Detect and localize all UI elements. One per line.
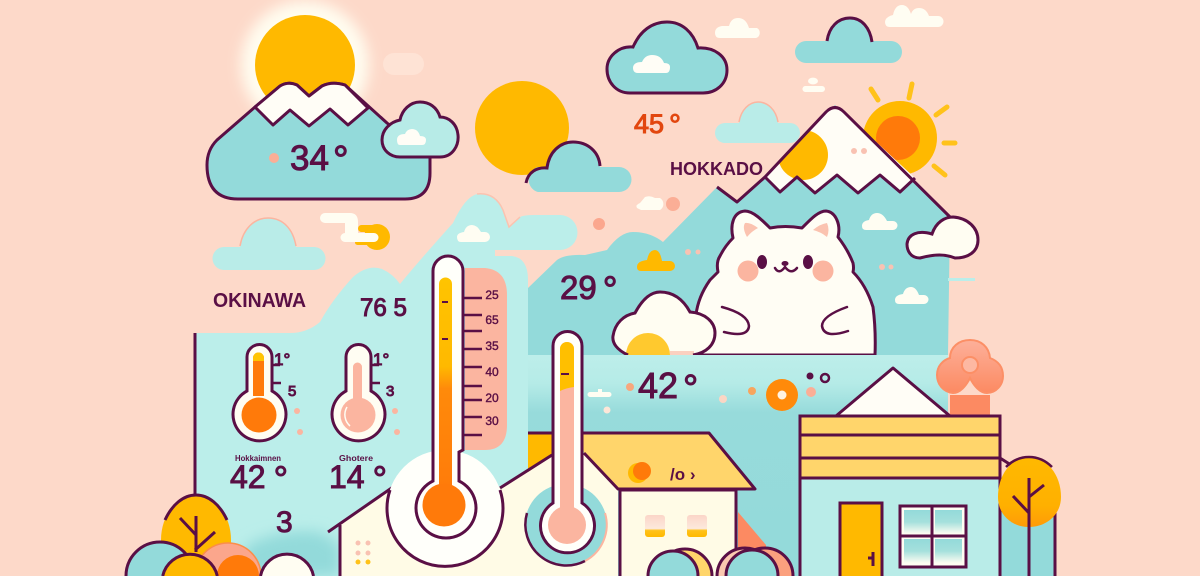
door [840,503,882,576]
house dots [356,540,370,564]
pale teal panel [195,194,578,576]
scale numbers: 40 [485,365,499,379]
pale dash [948,278,975,281]
small thermometer left [233,344,303,441]
big house right [800,368,1011,576]
top cloud [607,22,727,93]
small thermometer right [332,345,400,441]
sun with glow [241,1,424,129]
pale cloud [715,102,800,143]
house body [800,478,1000,576]
pink bush [937,340,1003,417]
lower teal band [528,355,948,576]
value 34: ° [333,139,349,182]
cloud on the mountain badge [382,102,458,157]
roof icon [628,462,651,483]
sun behind the mountain [863,84,955,175]
label: Hokkaido: HOKKADO [670,159,763,179]
scale panel [465,268,507,450]
left pale cloud [213,218,326,270]
white cloud [715,18,760,38]
scale numbers: 20 [485,391,499,405]
scale numbers: 25 [485,288,499,302]
big thermometer [387,256,507,566]
scale labels: 1° [373,350,389,369]
label: Okinawa: OKINAWA [213,290,306,312]
teal cloud under sun [526,142,632,192]
white cloud on right slope [907,217,978,258]
snow dots [851,148,867,154]
yellow small cloud [637,250,675,271]
mountain badge: 34 degrees [207,83,430,199]
value 34: 34 [290,139,329,178]
small dots [685,249,894,270]
small pale shapes and dots [593,196,680,230]
value: 29 degrees: ° [603,269,618,310]
city label right: Ghotere [339,454,374,463]
small house body [620,490,766,576]
scale labels: 1° [274,350,290,369]
cat mascot [696,211,875,355]
scale ticks [463,298,482,435]
wisp and small sun [320,213,390,250]
window left [645,515,665,537]
infographic illustration [124,0,1061,576]
value: 42 degrees: 42 [230,459,266,495]
scale value: 5 [288,383,296,400]
right teal strip and tree [998,457,1061,576]
window right [687,515,707,537]
window [900,506,966,567]
value: 29 degrees: 29 [560,269,597,306]
label: 76 5: 76 5 [360,294,407,322]
city label left: Hokkaimnen [235,454,281,463]
value: 42 degrees centre: 42 [638,365,678,406]
centre sun [475,81,569,175]
scale numbers: 65 [485,313,499,327]
white cloud top right [885,5,944,27]
roof symbols: /o › [670,465,696,484]
front cloud with sun [613,292,715,355]
small white cloud [802,78,825,92]
striped roof [800,416,1000,478]
pale cloud on panel [457,225,490,242]
value: 42 degrees: ° [274,458,288,499]
scale value: 3 [386,383,394,400]
mountain and teal backdrop [528,105,950,355]
decorative orange ring and dots [588,372,829,414]
second thermometer [525,332,607,566]
gable [836,368,950,416]
number 3: 3 [276,506,293,539]
value: 14 degrees: ° [373,458,387,499]
trees lower left [126,495,314,576]
white cloud low [895,287,928,304]
value: 42 degrees centre: ° [683,368,698,410]
scale numbers: 30 [485,414,499,428]
label: 45 degrees: ° [669,109,681,142]
label: 45 degrees: 45 [634,109,664,139]
white cloud on slope [862,213,898,230]
flat teal cloud [795,18,902,63]
scale numbers [485,288,499,428]
value: 14 degrees: 14 [329,459,365,495]
cream house left and roof [328,432,755,576]
scale numbers: 35 [485,339,499,353]
round shapes below small house [648,548,793,576]
